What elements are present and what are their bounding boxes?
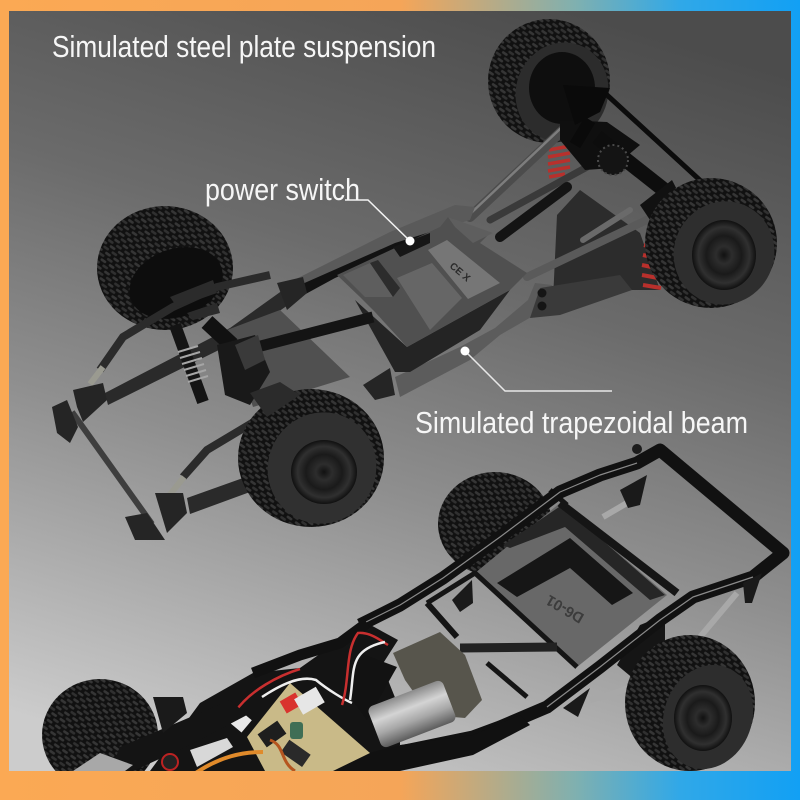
rear suspension bracket [617, 615, 665, 680]
battery label marks: CE X [447, 261, 472, 285]
wheel: front right [238, 389, 395, 542]
front axle and driveshaft [207, 317, 373, 405]
front brackets [52, 277, 395, 540]
wheel: lower far [438, 472, 552, 576]
leaf springs [90, 275, 270, 497]
red rear spring top [548, 146, 570, 177]
dark motor bay [345, 653, 397, 720]
frame rails [253, 450, 783, 771]
main beam [395, 275, 632, 397]
wheel bracket top [632, 444, 642, 454]
red rear spring right [642, 245, 661, 288]
callout: power switch [205, 172, 414, 246]
steel leaf strips [590, 503, 737, 700]
bottom border strip [0, 771, 800, 800]
driveshaft [460, 647, 557, 648]
callout: trapezoidal beam [415, 346, 748, 440]
wheel: front left [97, 206, 233, 331]
shock absorber [175, 325, 208, 402]
upper chassis [52, 19, 791, 542]
chassis side rails [105, 205, 475, 514]
rear axle and differential [560, 85, 685, 235]
beam callout dot [460, 346, 470, 356]
circuit board [226, 683, 370, 771]
inner frame members [427, 490, 677, 697]
title label: steel plate suspension: Simulated steel plate suspension [52, 29, 436, 64]
front bar [72, 412, 152, 524]
lower chassis [42, 444, 783, 791]
battery tray [475, 503, 667, 667]
wheel: lower left [42, 679, 158, 791]
tray marking: D6-01 [543, 591, 587, 626]
callout dot [406, 236, 414, 246]
gearbox [393, 632, 482, 718]
wheel: rear top [488, 19, 622, 155]
callout line [345, 200, 410, 241]
rear links [470, 95, 703, 277]
wheel: rear right [645, 178, 791, 321]
motor [367, 679, 457, 749]
under tray plane [227, 310, 350, 407]
front cross piece [73, 697, 247, 771]
beam callout text: Simulated trapezoidal beam [415, 405, 748, 440]
frame floor [150, 622, 400, 771]
wires [190, 633, 388, 777]
wheel: lower near right [625, 635, 767, 782]
underbody shadow [553, 190, 660, 300]
lower front rail [300, 715, 530, 771]
battery box [337, 217, 527, 372]
callout text: power switch [205, 172, 360, 207]
beam callout line [465, 351, 612, 391]
frame brackets [452, 475, 762, 717]
axle clamps [170, 280, 300, 417]
